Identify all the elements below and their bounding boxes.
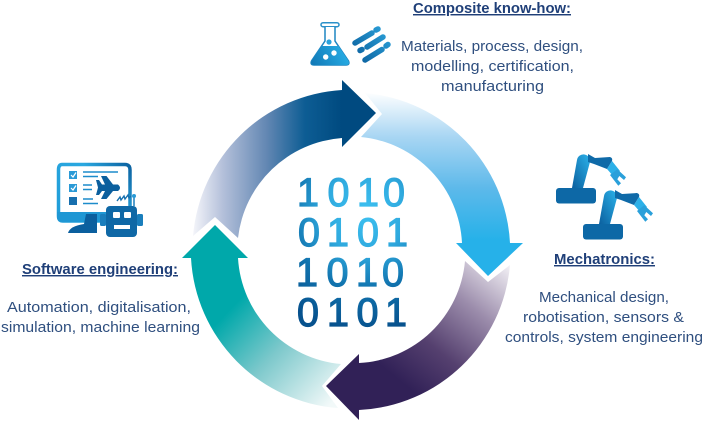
- signal zigzag: [117, 195, 131, 201]
- binary digits in the centre: 1: [327, 211, 349, 255]
- binary digits in the centre: 0: [382, 251, 404, 295]
- arrow: teal: [182, 225, 341, 408]
- binary digits in the centre: 0: [327, 251, 348, 295]
- text: mechatronics description: Mechanical design,: [539, 290, 669, 306]
- text: composite know-how description: manufacturing: [441, 79, 544, 95]
- heading: mechatronics: Mechatronics:: [554, 252, 655, 268]
- text: mechatronics description: controls, system engineering: [505, 330, 703, 346]
- cycle of four arrows: [182, 80, 523, 420]
- binary digits in the centre: 1: [296, 251, 318, 295]
- arrow: purple: [326, 261, 510, 420]
- binary digits in the centre: 1: [327, 291, 349, 335]
- text: composite know-how description: [401, 39, 583, 95]
- heading: software engineering: Software engineering:: [22, 262, 178, 278]
- text: composite know-how description: Materials, process, design,: [401, 39, 583, 55]
- robot arm two: [583, 190, 653, 240]
- text: mechatronics description: [505, 290, 703, 346]
- binary digits in the centre: 0: [357, 211, 379, 255]
- binary digits in the centre: 0: [328, 171, 349, 215]
- icon: robot arms: [556, 154, 653, 240]
- heading: composite know-how: Composite know-how:: [413, 1, 571, 17]
- arrow: dark blue: [193, 80, 376, 238]
- robot arm one: [556, 154, 626, 204]
- binary digits in the centre: 1: [385, 291, 407, 335]
- monitor: [58, 164, 130, 221]
- binary digits in the centre: 1: [386, 211, 408, 255]
- text: software engineering description: Automation, digitalisation,: [7, 300, 191, 316]
- binary digits in the centre: 0: [297, 291, 319, 335]
- text: composite know-how description: modelling, certification,: [411, 59, 574, 75]
- binary digits in the centre: 0: [357, 291, 378, 335]
- text: software engineering description: [1, 300, 200, 336]
- binary digits in the centre: 0: [298, 211, 320, 255]
- text: mechatronics description: robotisation, sensors &: [523, 310, 684, 326]
- text: software engineering description: simulation, machine learning: [1, 320, 200, 336]
- plane: [96, 176, 120, 199]
- binary digits in the centre: 1: [297, 171, 319, 215]
- binary digits in the centre: [296, 171, 408, 335]
- arrow: light blue: [361, 93, 523, 276]
- binary digits in the centre: 1: [356, 251, 378, 295]
- icon: flask: [311, 23, 349, 65]
- binary digits in the centre: 0: [383, 171, 405, 215]
- icon: monitor with plane and robot: [57, 164, 143, 237]
- icon: data bars: [355, 29, 388, 60]
- robot head: [100, 194, 143, 237]
- checklist: [69, 171, 118, 205]
- binary digits in the centre: 1: [357, 171, 379, 215]
